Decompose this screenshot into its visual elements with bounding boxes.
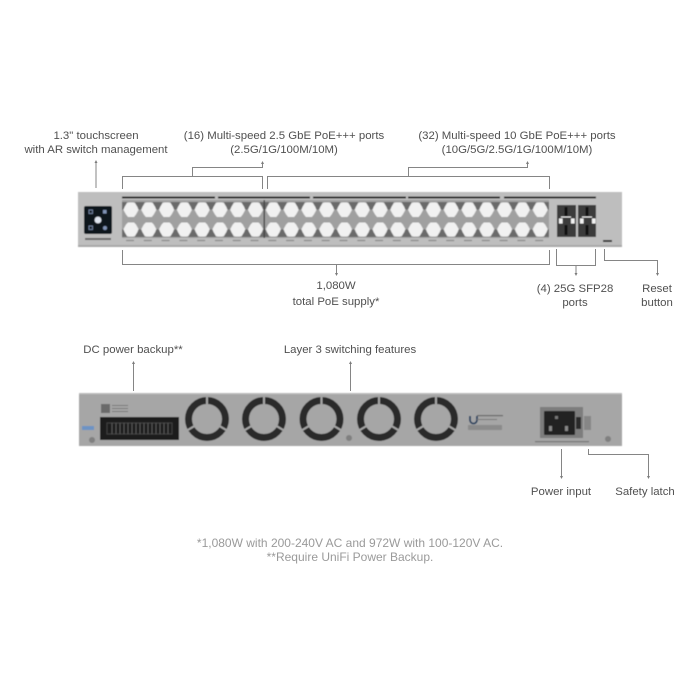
- grounding screws: [89, 435, 611, 443]
- power inlet: [540, 407, 583, 438]
- top status bars: [122, 196, 596, 198]
- QR label: [101, 404, 128, 413]
- rear panel of switch: [79, 393, 622, 446]
- touchscreen: [84, 206, 112, 234]
- safety latch: [576, 416, 591, 430]
- cooling fans: [187, 396, 456, 438]
- callout: total PoE supply: 1,080W: [316, 280, 356, 292]
- callout: reset button: Reset: [642, 283, 673, 295]
- callout: total PoE supply: total PoE supply*: [293, 296, 380, 308]
- callout: touchscreen: [23, 130, 168, 188]
- callout: 16 multi-speed ports: [122, 130, 384, 189]
- callout: Layer 3 switching: [284, 344, 416, 391]
- callout: reset button: [604, 249, 673, 309]
- callout: 16 multi-speed ports: (2.5G/1G/100M/10M): [230, 144, 338, 156]
- callout: SFP28 ports: (4) 25G SFP28: [537, 283, 613, 295]
- callout: power input: Power input: [531, 486, 592, 498]
- Ubiquiti logo and regulatory text: [468, 415, 503, 430]
- front panel of switch: [78, 192, 622, 247]
- callout: touchscreen: 1.3" touchscreen: [53, 130, 139, 142]
- callout: power input: [531, 449, 592, 498]
- callout: reset button: button: [641, 297, 673, 309]
- callout: 32 multi-speed ports: (32) Multi-speed 10 GbE PoE+++ ports: [418, 130, 616, 142]
- port number labels: [126, 240, 547, 242]
- callout: DC power backup: [83, 344, 183, 391]
- SFP28 cages: [557, 205, 596, 237]
- footnotes: **Require UniFi Power Backup.: [267, 550, 433, 564]
- callout: touchscreen: with AR switch management: [23, 144, 168, 156]
- callout: 16 multi-speed ports: (16) Multi-speed 2.5 GbE PoE+++ ports: [184, 130, 384, 142]
- DC power connector: [100, 417, 179, 440]
- footnotes: [197, 536, 503, 564]
- RJ45 ports block: [122, 200, 549, 238]
- callout: SFP28 ports: ports: [562, 297, 588, 309]
- rating label: [535, 441, 589, 442]
- callout: total PoE supply: [122, 250, 550, 308]
- callout: Layer 3 switching: Layer 3 switching features: [284, 344, 416, 356]
- callout: safety latch: [588, 449, 675, 498]
- callout: DC power backup: DC power backup**: [83, 344, 183, 356]
- reset button: [603, 240, 612, 242]
- callout: safety latch: Safety latch: [615, 486, 675, 498]
- footnotes: *1,080W with 200-240V AC and 972W with 100-120V AC.: [197, 536, 503, 550]
- callout: 32 multi-speed ports: (10G/5G/2.5G/1G/100M/10M): [442, 144, 593, 156]
- model label under touchscreen: [85, 238, 111, 240]
- status LED: [82, 426, 94, 430]
- callout: SFP28 ports: [537, 249, 613, 309]
- callout: 32 multi-speed ports: [268, 130, 616, 189]
